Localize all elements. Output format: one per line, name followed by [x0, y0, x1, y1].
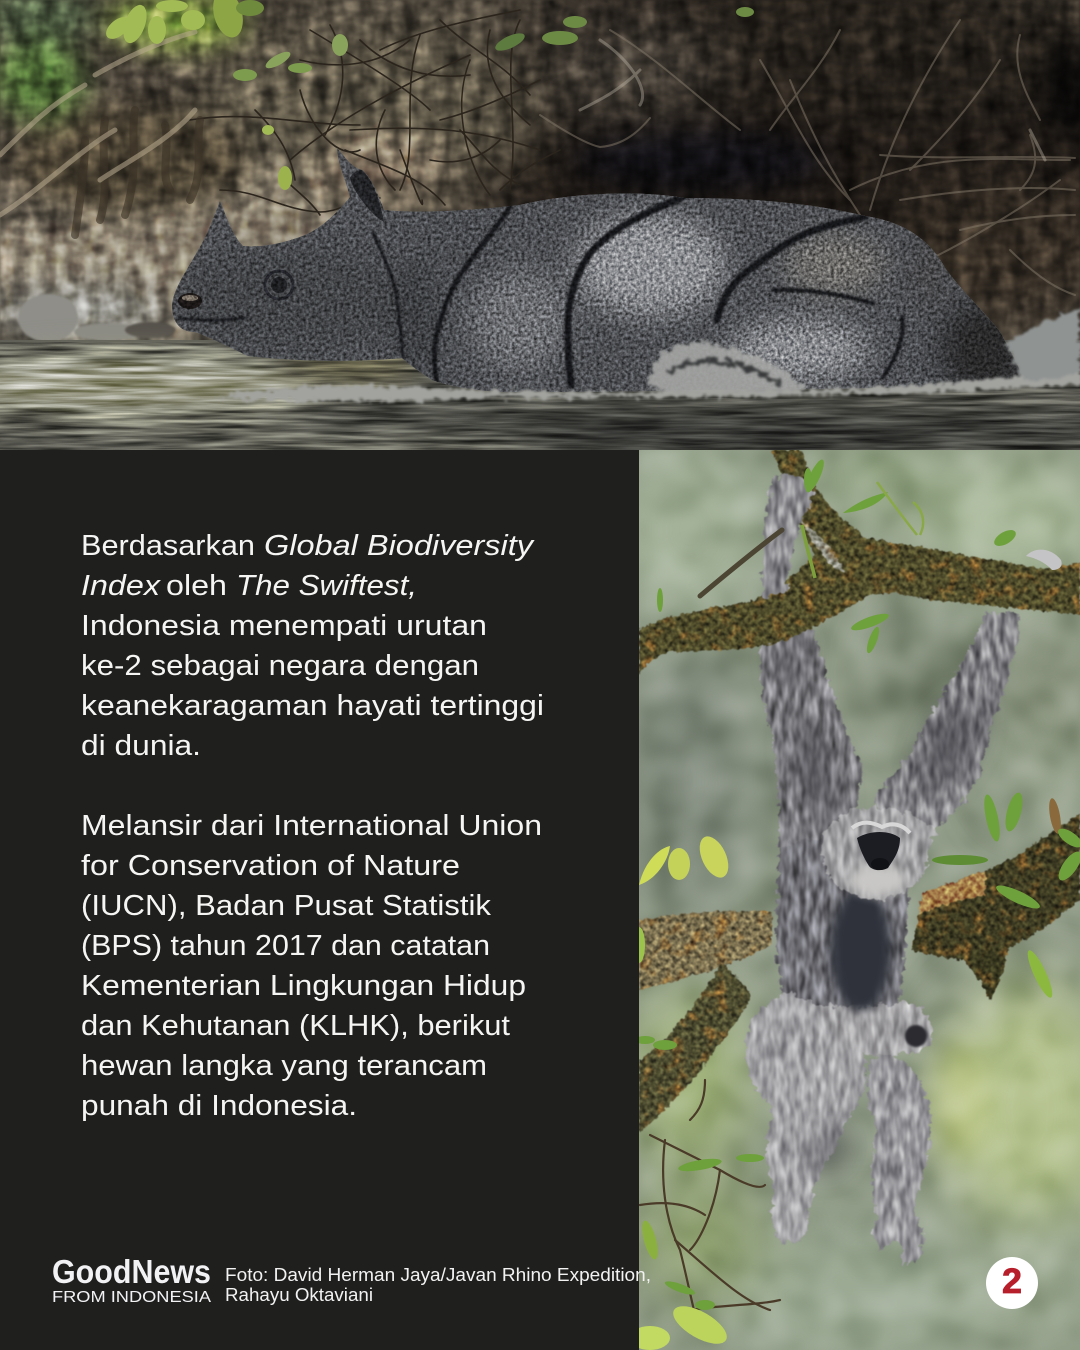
small stick	[700, 530, 782, 596]
water splash	[215, 308, 1080, 401]
logo: GoodNews from Indonesia	[52, 1253, 212, 1306]
paragraph 1: di dunia.	[81, 730, 201, 762]
page number badge: 2	[1002, 1262, 1022, 1301]
right leg	[868, 1056, 932, 1265]
paragraph 2: Kementerian Lingkungan Hidup	[81, 970, 526, 1002]
page number badge	[986, 1257, 1038, 1309]
body text panel	[81, 530, 544, 1122]
blurred forest background	[610, 440, 1080, 1350]
brush texture	[0, 0, 1080, 345]
arm hanging left	[758, 629, 863, 896]
rhino body	[160, 140, 1040, 400]
paragraph 1	[81, 530, 544, 762]
photo: Javan rhino in a river	[0, 0, 1080, 457]
water	[0, 340, 1080, 457]
green leaves	[102, 0, 754, 190]
paragraph 1: Indonesia menempati urutan	[81, 610, 487, 642]
baby gibbon face	[905, 1025, 927, 1047]
rhino nostril	[178, 293, 202, 309]
gibbon upper arm and hand gripping the fork	[763, 475, 815, 598]
green leaves	[630, 458, 1080, 1350]
rhino eye	[265, 271, 293, 299]
paragraph 2: Melansir dari International Union	[81, 810, 542, 842]
twigs and roots	[0, 10, 1075, 295]
paragraph 2: hewan langka yang terancam	[81, 1050, 487, 1082]
gibbon torso shadow	[831, 888, 891, 1012]
main tree branch in front of the arms	[639, 450, 1080, 675]
arm reaching right	[872, 613, 1019, 832]
lap and left thigh	[746, 990, 867, 1243]
paragraph 2: (BPS) tahun 2017 dan catatan	[81, 930, 490, 962]
torso	[776, 838, 915, 1015]
gibbon body	[746, 588, 1019, 1265]
baby gibbon	[855, 1000, 934, 1058]
rocks	[18, 294, 175, 342]
gibbon hand on the branch	[1026, 550, 1062, 570]
twigs lower left	[640, 1080, 780, 1330]
paragraph 1: The Swiftest,	[236, 570, 417, 602]
gibbon head	[822, 808, 939, 900]
photo credit: Foto: David Herman Jaya/Javan Rhino Expedition,	[225, 1265, 651, 1285]
photo credit	[225, 1265, 651, 1305]
photo credit: Rahayu Oktaviani	[225, 1285, 373, 1305]
paragraph 1: Index	[81, 570, 162, 602]
gibbon arm shadows	[778, 630, 993, 1179]
paragraph 1: Global Biodiversity	[264, 530, 535, 562]
paragraph 1: keanekaragaman hayati tertinggi	[81, 690, 544, 722]
paragraph 2: (IUCN), Badan Pusat Statistik	[81, 890, 492, 922]
paragraph 2: punah di Indonesia.	[81, 1090, 357, 1122]
paragraph 1: oleh	[166, 570, 227, 602]
paragraph 1: Berdasarkan	[81, 530, 255, 562]
paragraph 2	[81, 810, 542, 1122]
paragraph 2: for Conservation of Nature	[81, 850, 460, 882]
photo: silvery gibbon hanging from a branch	[610, 440, 1080, 1350]
lower tree branches	[639, 813, 1080, 1133]
paragraph 1: ke-2 sebagai negara dengan	[81, 650, 479, 682]
logo: GoodNews from Indonesia: FROM INDONESIA	[52, 1289, 212, 1306]
paragraph 2: dan Kehutanan (KLHK), berikut	[81, 1010, 510, 1042]
logo: GoodNews from Indonesia: GoodNews	[52, 1253, 211, 1290]
riverbank colour masses	[0, 0, 1080, 340]
